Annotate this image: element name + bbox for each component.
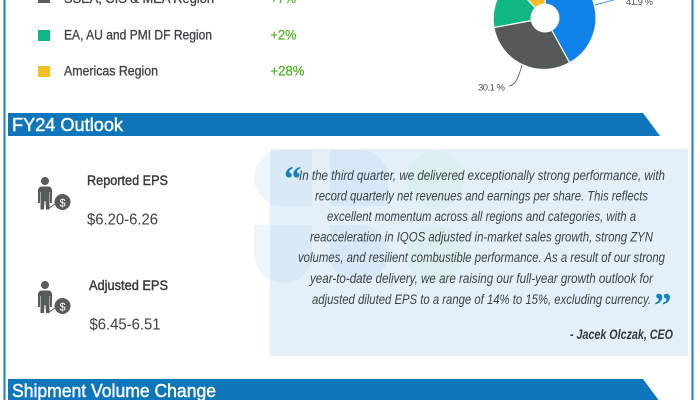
donut segment: green: [493, 0, 545, 28]
legend row: EA, AU and PMI DF: [38, 28, 296, 42]
icon: opening quote mark: “: [284, 159, 302, 198]
section heading: FY24 Outlook: [8, 113, 660, 136]
donut chart: regional share: [478, 0, 654, 94]
quote attribution: - Jacek Olczak, CEO: [570, 327, 673, 342]
donut segment: yellow: [510, 0, 545, 18]
donut segment: blue 41.9 percent: [545, 0, 596, 63]
legend row: Americas: [38, 64, 304, 78]
section heading: Shipment Volume Change: [8, 379, 660, 400]
leader line: grey: [509, 65, 522, 86]
quote text: [298, 168, 665, 307]
section heading: FY24 Outlook: FY24 Outlook: [12, 114, 124, 135]
donut segment: grey 30.1 percent: [494, 18, 570, 70]
legend: regional shipment change: [38, 0, 304, 78]
legend row: Americas: Americas Region: [64, 64, 158, 78]
heading: Adjusted EPS: [89, 278, 168, 293]
panel watermark shapes: [254, 150, 464, 283]
legend row: SSEA, CIS and MEA: [38, 0, 296, 6]
label: 30.1 percent: 30.1 %: [478, 82, 506, 94]
metric: Adjusted EPS: [38, 278, 168, 334]
icon: person with dollar coin: $: [59, 302, 66, 314]
icon: person with dollar coin: $: [59, 198, 66, 210]
decorative watermark shapes: [254, 153, 270, 280]
quote text: excellent momentum across all regions and categories, with a: [327, 209, 636, 224]
heading: Reported EPS: [87, 173, 168, 188]
metric: Reported EPS: [38, 173, 168, 228]
icon: closing quote mark: ”: [654, 286, 672, 325]
value: $6.45-6.51: [90, 316, 160, 334]
legend row: EA, AU and PMI DF: +2%: [270, 28, 296, 42]
panel: CEO quote: [254, 149, 688, 356]
legend row: EA, AU and PMI DF: EA, AU and PMI DF Region: [64, 28, 212, 42]
leader line: blue: [595, 0, 617, 5]
legend row: Americas: +28%: [270, 64, 304, 78]
value: $6.20-6.26: [87, 212, 158, 228]
